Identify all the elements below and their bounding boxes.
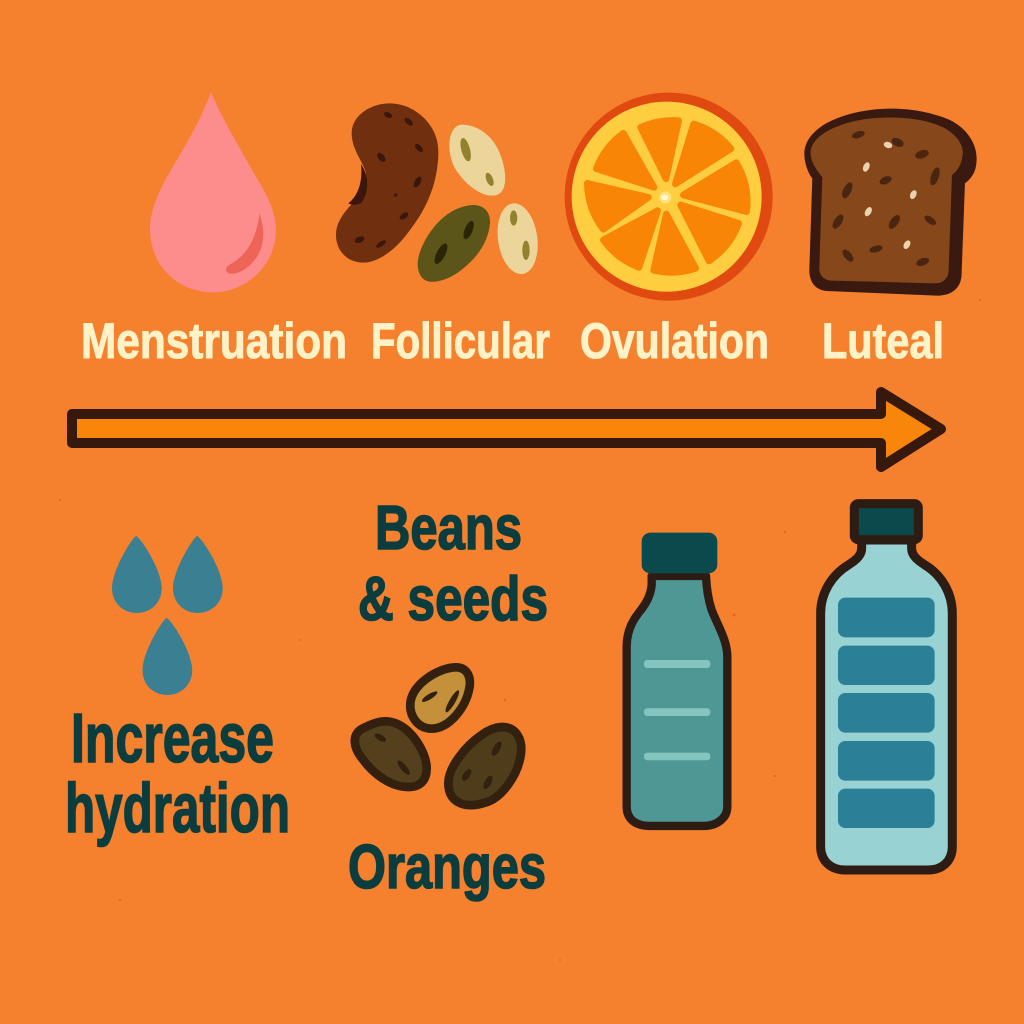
text: Increase hydration <box>65 699 290 847</box>
icon: three seeds <box>355 667 521 805</box>
phase labels <box>81 313 944 369</box>
text: Beans & seeds: Beans <box>375 494 522 563</box>
text: Oranges: Oranges <box>348 833 546 902</box>
label: Luteal: Luteal <box>822 313 944 369</box>
arrow: cycle progression <box>72 392 941 467</box>
icon: beans and seeds <box>336 103 542 282</box>
icon: menstruation blood drop <box>150 92 276 292</box>
big kidney bean <box>336 103 438 263</box>
icon: large water bottle <box>821 504 952 870</box>
icon: orange slice <box>565 93 773 301</box>
pale seed lower <box>493 201 542 277</box>
top seed <box>410 667 470 729</box>
label: Menstruation: Menstruation <box>81 313 347 369</box>
icon: whole grain bread <box>804 109 977 296</box>
text: Increase hydration: hydration <box>65 769 290 847</box>
text: Increase hydration: Increase <box>71 699 274 777</box>
icon: three water drops <box>112 536 223 695</box>
text: Beans & seeds: & seeds <box>358 565 548 634</box>
left seed <box>355 721 427 787</box>
label: Follicular: Follicular <box>371 313 550 369</box>
label: Ovulation: Ovulation <box>580 313 769 369</box>
icon: small water bottle <box>627 533 727 826</box>
pale seed upper <box>449 125 505 196</box>
olive seed <box>418 205 490 282</box>
right seed <box>448 727 521 805</box>
text: Beans & seeds <box>358 494 548 634</box>
